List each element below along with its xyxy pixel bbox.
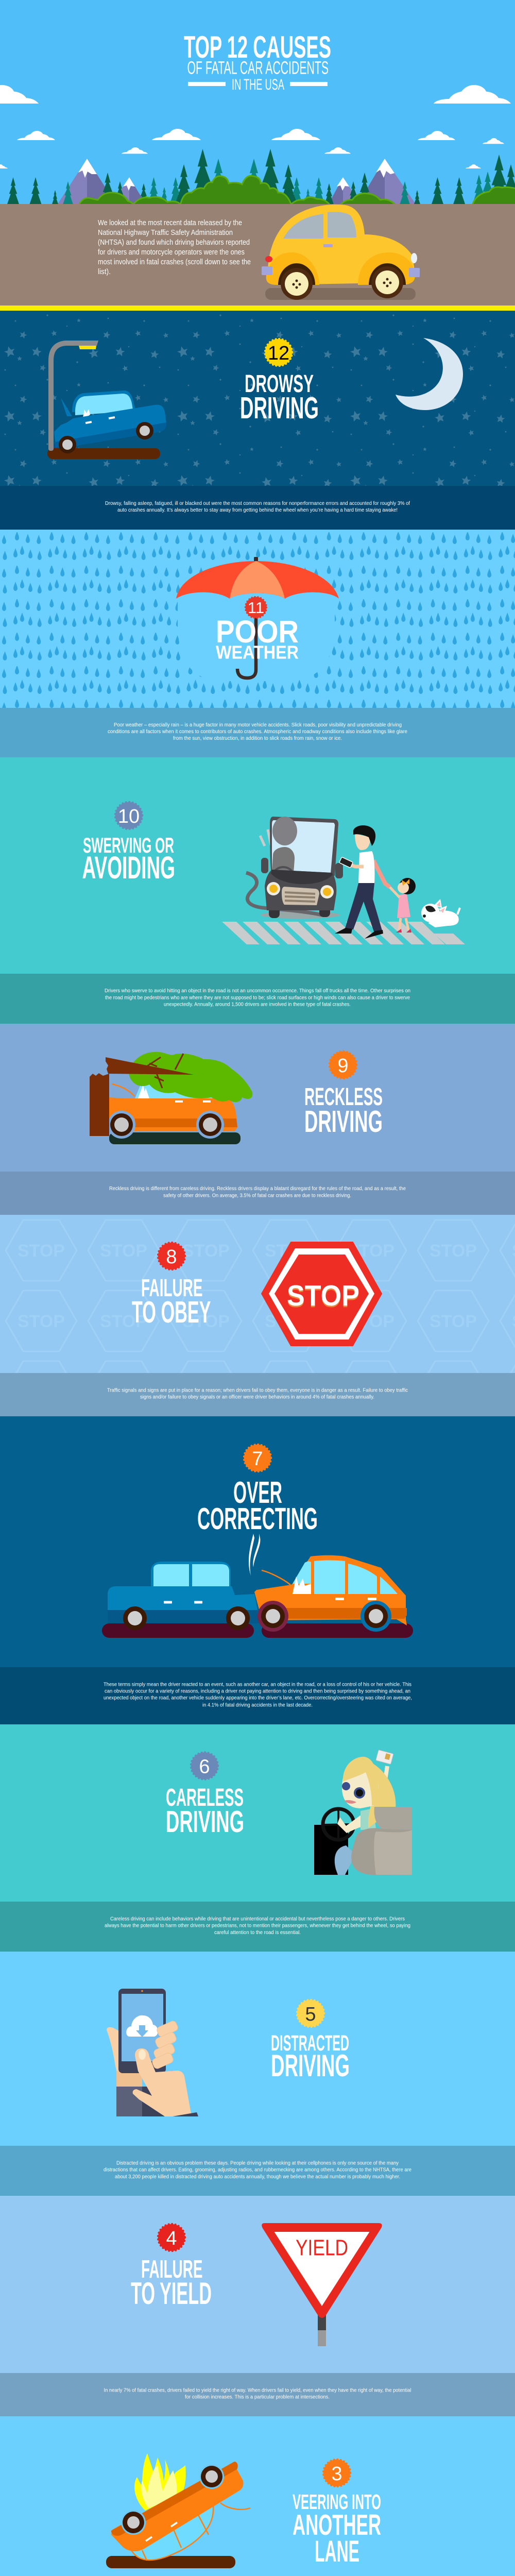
panel: 9 description: [0, 1172, 515, 1215]
heading: poor weather: [216, 614, 299, 663]
badge 10: [115, 802, 142, 829]
intro text: (NHTSA) and found which driving behaviors reported: [98, 239, 250, 247]
icon: man with phone: [335, 825, 390, 939]
panel: 6 description: always have the potential to harm other drivers or pedestrians, not to mention their passengers, whenever they get behind the wheel, so paying: [105, 1923, 410, 1929]
heading: failure to obey: [132, 1275, 211, 1329]
title: OF FATAL CAR ACCIDENTS: [187, 58, 329, 78]
panel: 12 description: [0, 486, 515, 530]
panel: 11 description: [0, 708, 515, 757]
badge 11: 11: [248, 599, 264, 617]
panel: 5 description: Distracted driving is an obvious problem these days. People driving while looking at their cellphones is only one source of the many: [116, 2160, 399, 2166]
icon: yield sign: [262, 2223, 382, 2346]
heading: failure to obey: TO OBEY: [132, 1295, 211, 1329]
panel: 9 reckless driving: [0, 1024, 515, 1172]
icon: running dog: [421, 899, 460, 927]
panel: 7 description: These terms simply mean the driver reacted to an event, such as another car, an object in the road, or a loss of control of his or her vehicle. This: [104, 1682, 411, 1688]
panel: 12 description: auto crashes annually. It’s always better to stay away from getting behind the wheel when you’re having a hard time staying awake!: [117, 507, 398, 513]
panel: 4 failure to yield: [0, 2196, 515, 2373]
icon: smoke: [249, 1534, 260, 1575]
panel: 5 description: distractions that can affect drivers. Eating, grooming, adjusting radios, and rubbernecking are among others. According to the NHTSA, there are: [104, 2167, 411, 2173]
badge 11: [245, 597, 267, 618]
intro text: most involved in fatal crashes (scroll down to see the: [98, 258, 251, 266]
badge 12: 12: [268, 343, 289, 364]
badge 12: [265, 339, 292, 366]
icon: crescent moon: [396, 338, 463, 410]
panel: road intro: [0, 204, 515, 306]
icon: flipped burning car: [106, 2453, 250, 2568]
panel: 3 veering into another lane: [0, 2416, 515, 2576]
heading: over correcting: CORRECTING: [197, 1502, 318, 1536]
panel: 7 description: unexpected object on the road, another vehicle suddenly appearing into the driver’s lane, etc. Overcorrecting/oversteering was cited on average,: [104, 1695, 412, 1701]
panel: 9 description: Reckless driving is different from careless driving. Reckless drivers display a blatant disregard for the rules of the road, and as a result, the: [109, 1185, 406, 1192]
badge 6: [191, 1753, 218, 1780]
badge 9: [330, 1052, 356, 1078]
panel: 10 description: the road might be pedestrians who are where they are not supposed to be; slick road surfaces or high winds can also cause a driver to swerve: [105, 994, 410, 1001]
heading: swerving or avoiding: SWERVING OR: [83, 833, 174, 857]
icon: collided cars: [102, 1555, 413, 1638]
bushes: [79, 176, 515, 205]
icon: umbrella: [176, 557, 339, 678]
badge 4: 4: [166, 2228, 177, 2249]
icon: crashed blue car: [47, 366, 166, 459]
panel: 11 description: Poor weather – especially rain – is a huge factor in many motor vehicle accidents. Slick roads, poor visibility and unpredictable driving: [114, 722, 402, 728]
badge 8: [158, 1243, 185, 1269]
icon: car hit by tree: [90, 1052, 252, 1144]
heading: veering into another lane: [293, 2490, 381, 2568]
badge 5: [297, 2000, 324, 2027]
title: IN THE USA: [232, 76, 284, 93]
icon: stop sign: [262, 1242, 382, 1346]
panel: 6 description: [0, 1902, 515, 1952]
icon: swerving truck: [246, 817, 343, 919]
heading: failure to yield: TO YIELD: [131, 2276, 212, 2311]
badge 4: [158, 2224, 185, 2251]
heading: veering into another lane: VEERING INTO: [293, 2490, 381, 2514]
badge 9: 9: [337, 1055, 349, 1077]
panel: 11 description: conditions are all factors when it comes to contributors of auto crashes. Atmospheric and roadway conditions also include things like glare: [108, 728, 407, 735]
heading: over correcting: OVER: [233, 1476, 282, 1510]
intro text: for drivers and motorcycle operators were the ones: [98, 248, 245, 257]
panel: 8 description: signs and/or failure to obey signals or an officer were driver behaviors in around 4% of fatal crashes annually.: [140, 1394, 374, 1400]
icon: crosswalk: [222, 922, 465, 944]
icon: hand holding phone: [107, 1989, 198, 2116]
panel: 6 description: Careless driving can include behaviors while driving that are unintentional or accidental but nevertheless pose a danger to others. Drivers: [110, 1916, 405, 1922]
panel: 7 over correcting: [0, 1416, 515, 1667]
heading: failure to yield: FAILURE: [141, 2256, 203, 2283]
panel: 7 description: can obviously occur for a variety of reasons, including a driver not paying attention to driving and then being surprised by something ahead, an: [105, 1688, 410, 1694]
icon: yield sign: YIELD: [296, 2235, 348, 2261]
panel: 8 description: [0, 1373, 515, 1416]
icon: yellow car: [262, 205, 420, 300]
panel: 5 description: [0, 2146, 515, 2196]
title: TOP 12 CAUSES: [184, 30, 331, 64]
icon: girl: [390, 878, 416, 933]
heading: veering into another lane: ANOTHER: [293, 2509, 381, 2541]
intro text: National Highway Traffic Safety Administration: [98, 229, 233, 237]
icon: girl taking selfie while driving: [314, 1750, 412, 1875]
heading: failure to yield: [131, 2256, 212, 2311]
panel: 11 poor weather: [0, 530, 515, 708]
yellow divider: [0, 306, 515, 311]
panel: 7 description: [0, 1667, 515, 1724]
icon: stop sign: STOP: [287, 1279, 359, 1312]
intro text: [98, 219, 251, 276]
heading: failure to obey: FAILURE: [141, 1275, 203, 1302]
panel: 10 description: [0, 974, 515, 1024]
heading: reckless driving: [304, 1083, 383, 1139]
panel: 5 description: about 3,200 people killed in distracted driving auto accidents annually, though we believe the actual number is probably much higher.: [115, 2174, 400, 2180]
heading: distracted driving: [271, 2031, 350, 2083]
panel: 8 description: Traffic signals and signs are put in place for a reason; when drivers fail to obey them, everyone is in danger as a result. Failure to obey traffic: [107, 1387, 408, 1393]
panel: 10 description: unexpectedly. Annually, around 1,500 drivers are involved in these type of fatal crashes.: [164, 1002, 351, 1008]
badge 3: 3: [331, 2463, 342, 2485]
panel: 8 failure to obey: [0, 1215, 515, 1373]
panel: 12 drowsy driving: [0, 311, 515, 486]
badge 5: 5: [305, 2004, 316, 2025]
heading: careless driving: DRIVING: [166, 1805, 244, 1839]
heading: swerving or avoiding: [82, 833, 175, 885]
badge 6: 6: [199, 1756, 210, 1777]
heading: careless driving: CARELESS: [166, 1784, 244, 1811]
icon: stop sign: STOP: [287, 1281, 359, 1314]
title: [184, 30, 331, 93]
badge 10: 10: [118, 806, 140, 827]
panel: 11 description: from the sun, view obstruction, in addition to slick roads from rain, snow or ice.: [173, 735, 342, 741]
panel: 6 careless driving: [0, 1724, 515, 1902]
heading: poor weather: WEATHER: [216, 642, 299, 663]
panel: 4 description: [0, 2373, 515, 2416]
heading: distracted driving: DRIVING: [271, 2048, 350, 2083]
heading: drowsy driving: DRIVING: [240, 391, 319, 425]
badge 7: [244, 1445, 271, 1471]
panel: intro sky: [0, 0, 515, 205]
panel: 10 description: Drivers who swerve to avoid hitting an object in the road is not an uncommon occurrence. Things fall off trucks all the time. Other surprises on: [105, 988, 410, 994]
heading: reckless driving: RECKLESS: [304, 1083, 383, 1111]
panel: 5 distracted driving: [0, 1952, 515, 2146]
panel: 7 description: in 4.1% of fatal driving accidents in the last decade.: [202, 1702, 313, 1708]
heading: over correcting: [197, 1476, 318, 1536]
heading: drowsy driving: DROWSY: [245, 370, 314, 398]
heading: poor weather: POOR: [216, 614, 299, 649]
heading: distracted driving: DISTRACTED: [271, 2031, 349, 2056]
panel: 9 description: safety of other drivers. On average, 3.5% of fatal car crashes are due to reckless driving.: [163, 1192, 351, 1198]
panel: 4 description: for collision increases. This is a particular problem at intersections.: [185, 2394, 330, 2400]
badge 7: 7: [252, 1448, 263, 1470]
heading: careless driving: [166, 1784, 244, 1839]
badge 3: [323, 2460, 350, 2486]
forest trees: [7, 149, 515, 204]
heading: reckless driving: DRIVING: [304, 1105, 383, 1139]
clouds: [0, 85, 511, 168]
heading: drowsy driving: [240, 370, 319, 425]
badge 8: 8: [166, 1246, 177, 1268]
mountains: [58, 159, 416, 204]
heading: swerving or avoiding: AVOIDING: [82, 850, 175, 885]
intro text: We looked at the most recent data released by the: [98, 219, 242, 227]
icon: street light: [51, 341, 98, 448]
panel: 6 description: careful attention to the road is essential.: [214, 1929, 301, 1936]
panel: 12 description: Drowsy, falling asleep, fatigued, ill or blacked out were the most common reasons for nonperformance errors and accounted for roughly 3% of: [105, 500, 410, 506]
panel: 4 description: In nearly 7% of fatal crashes, drivers failed to yield the right of way. When drivers fail to yield, even when they have the right of way, the potential: [104, 2387, 411, 2394]
intro text: list).: [98, 268, 111, 276]
panel: 10 swerving or avoiding: [0, 757, 515, 974]
heading: veering into another lane: LANE: [315, 2535, 359, 2568]
